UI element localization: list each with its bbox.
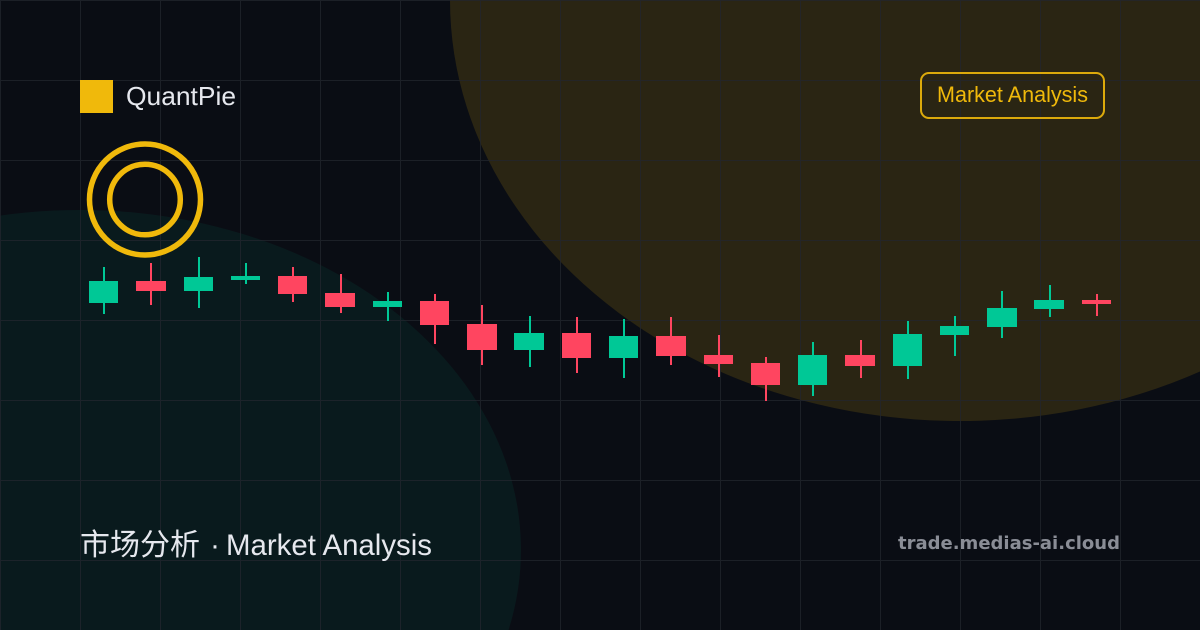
candlestick chart (89, 257, 1111, 401)
bullish candles (89, 257, 1064, 396)
brand name: QuantPie (126, 81, 236, 111)
bearish candles (136, 263, 1111, 401)
category badge (921, 73, 1104, 118)
title: Market Analysis (226, 529, 432, 562)
site domain: trade.medias-ai.cloud (898, 533, 1120, 554)
logo mark: gold square (80, 80, 113, 113)
background shape: teal ellipse (0, 210, 521, 630)
category badge: Market Analysis (937, 82, 1088, 107)
icon: concentric gold rings (90, 144, 200, 255)
title: 市场分析 (80, 529, 200, 562)
background shape: gold ellipse (450, 0, 1200, 421)
logo (80, 80, 236, 113)
title: · (210, 529, 220, 562)
